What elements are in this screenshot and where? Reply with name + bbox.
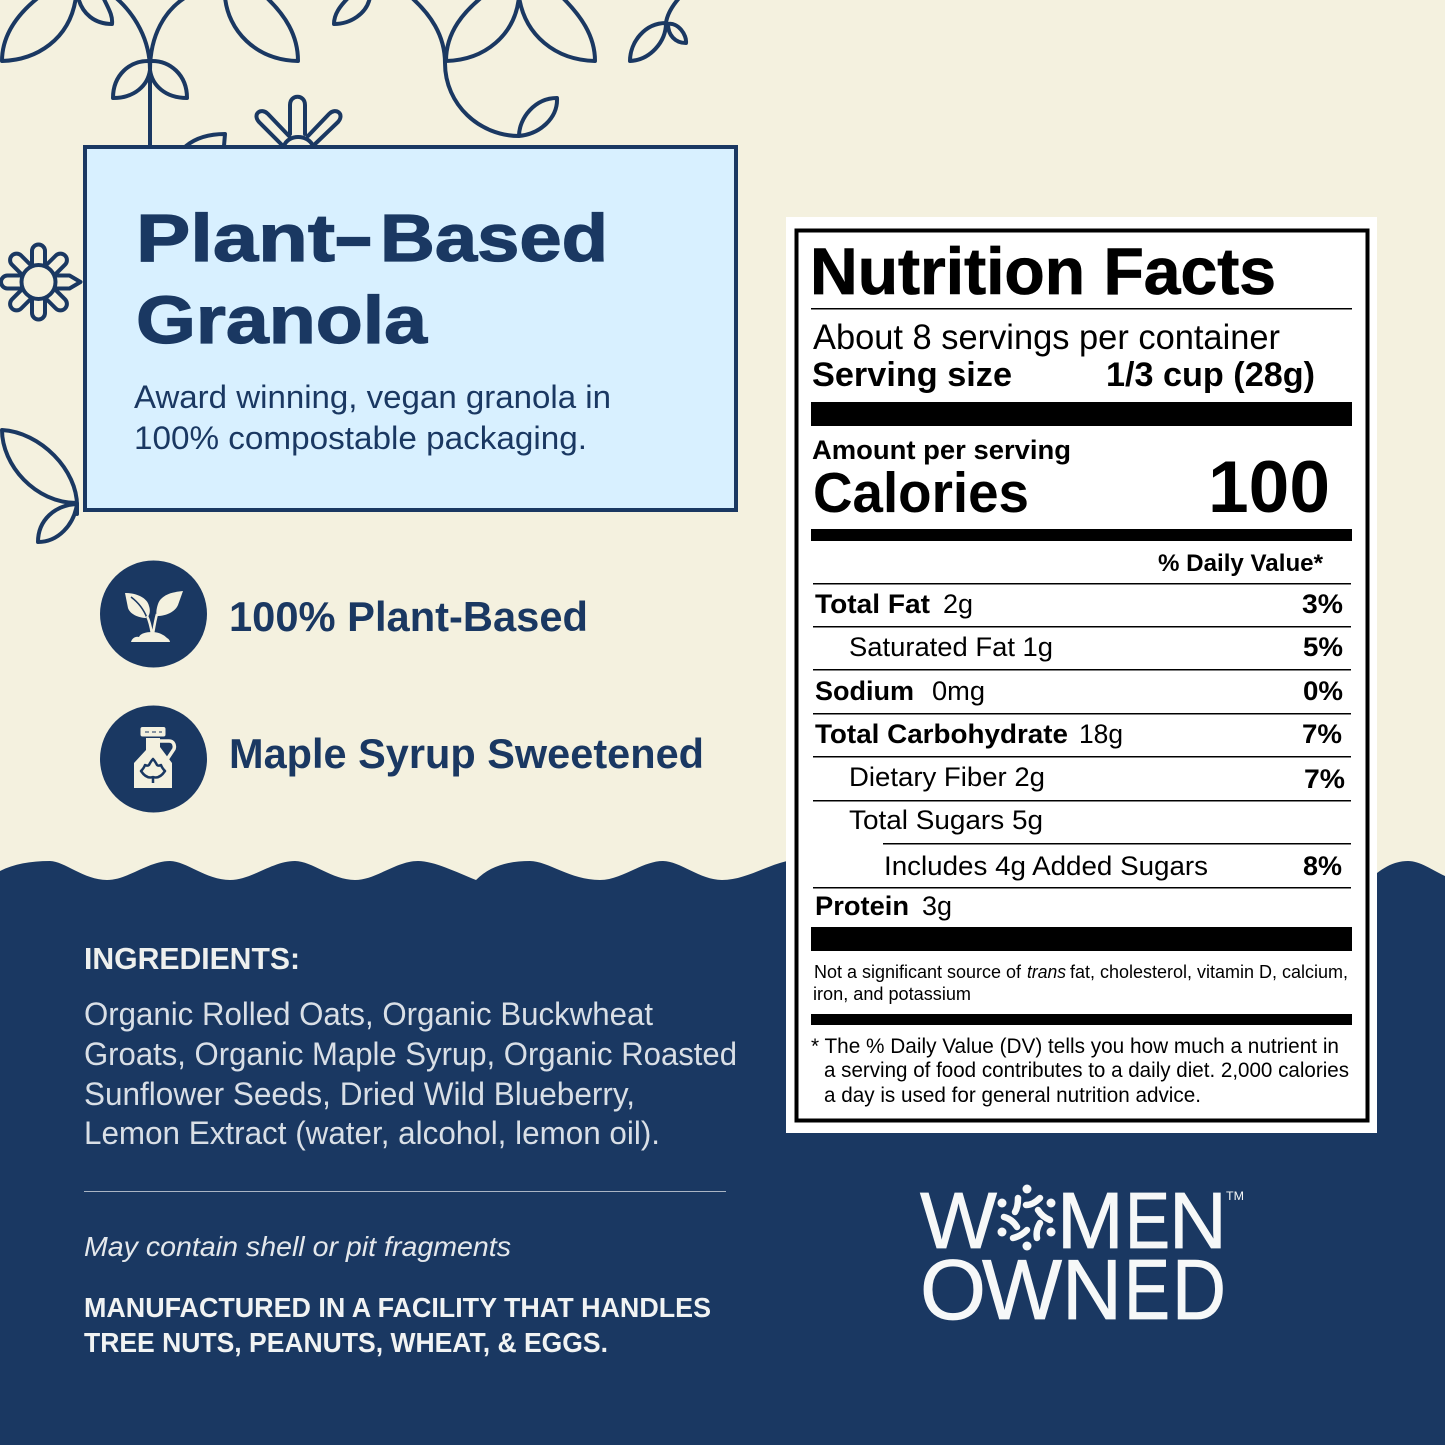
nutrient rows: Dietary Fiber 2g: [849, 762, 1045, 792]
heading: Based: [380, 201, 608, 276]
ingredients list: [84, 996, 737, 1151]
logo: women owned: W: [920, 1176, 997, 1265]
ingredients list: Sunflower Seeds, Dried Wild Blueberry,: [84, 1076, 635, 1112]
logo: women owned: D: [1172, 1243, 1226, 1338]
icon: maple syrup jug: [100, 706, 207, 812]
micronutrient note: fat, cholesterol, vitamin D, calcium,: [1070, 962, 1348, 982]
ingredients list: Groats, Organic Maple Syrup, Organic Roasted: [84, 1036, 737, 1072]
botanical line art: leaves: [2, 430, 77, 542]
daily value footnote: * The % Daily Value (DV) tells you how much a nutrient in: [811, 1035, 1339, 1058]
nutrient rows: Total Sugars 5g: [849, 805, 1043, 835]
nutrient rows: Saturated Fat 1g: [849, 632, 1053, 662]
logo: women owned: E: [1125, 1176, 1170, 1265]
nutrient rows: 5%: [1303, 632, 1343, 662]
nutrient rows: Sodium: [815, 676, 914, 706]
nutrient rows: [815, 589, 1345, 921]
description: Award winning, vegan granola in: [134, 379, 611, 415]
label: plant-based: 100% Plant-Based: [229, 593, 588, 640]
nutrient rows: 8%: [1303, 851, 1342, 881]
logo: women owned: [920, 1176, 1244, 1338]
label: maple syrup: Maple Syrup Sweetened: [229, 730, 704, 777]
description: [134, 379, 611, 456]
botanical line art: top: [2, 0, 686, 146]
icon: sprout: [100, 560, 207, 668]
heading: [136, 199, 608, 358]
daily value footnote: a day is used for general nutrition advice.: [824, 1084, 1201, 1107]
nutrient rows: Protein: [815, 891, 909, 921]
logo: women owned: N: [1169, 1176, 1227, 1265]
servings: [812, 318, 1315, 394]
nutrient rows: Total Carbohydrate: [815, 719, 1068, 749]
nutrition title: Nutrition Facts: [810, 234, 1276, 308]
panel: nutrition facts label: [786, 217, 1377, 1133]
calories: Calories: [813, 461, 1029, 525]
daily value footnote: a serving of food contributes to a daily diet. 2,000 calories: [824, 1059, 1349, 1082]
nutrient rows: 0%: [1303, 676, 1343, 706]
allergen note: May contain shell or pit fragments: [84, 1231, 511, 1262]
micronutrient note: Not a significant source of: [814, 962, 1022, 982]
heading: -: [333, 199, 374, 274]
nutrient rows: 18g: [1079, 719, 1123, 749]
daily value header: % Daily Value*: [1158, 550, 1324, 577]
facility warning: TREE NUTS, PEANUTS, WHEAT, & EGGS.: [84, 1327, 608, 1358]
ingredients list: Lemon Extract (water, alcohol, lemon oil).: [84, 1115, 660, 1151]
nutrient rows: 7%: [1304, 764, 1345, 794]
nutrient rows: Includes 4g Added Sugars: [884, 851, 1208, 881]
navy wave footer: [0, 861, 1445, 1445]
logo: women owned: M: [1057, 1176, 1124, 1265]
logo: women owned: W: [982, 1243, 1062, 1338]
calories: Amount per serving: [812, 435, 1071, 465]
heading: Plant: [136, 201, 335, 276]
calories: 100: [1208, 447, 1330, 528]
ingredients heading: INGREDIENTS:: [84, 941, 300, 976]
heading: Granola: [136, 283, 428, 358]
nutrient rows: Total Fat: [815, 589, 930, 619]
nutrient rows: 0mg: [932, 676, 985, 706]
logo: women owned: N: [1062, 1243, 1122, 1338]
panel: product title card: [85, 147, 736, 510]
micronutrient note: [813, 962, 1348, 1004]
facility warning: MANUFACTURED IN A FACILITY THAT HANDLES: [84, 1292, 711, 1323]
ingredients list: Organic Rolled Oats, Organic Buckwheat: [84, 996, 653, 1032]
nutrient rows: 3%: [1302, 589, 1343, 619]
nutrient rows: 3g: [922, 891, 952, 921]
servings: About 8 servings per container: [813, 318, 1280, 357]
servings: 1/3 cup (28g): [1106, 356, 1315, 394]
facility warning: [84, 1292, 711, 1358]
daily value footnote: [811, 1035, 1349, 1107]
calories: [812, 435, 1330, 528]
micronutrient note: trans: [1027, 962, 1066, 982]
logo: women owned: O: [920, 1243, 986, 1338]
micronutrient note: iron, and potassium: [813, 984, 971, 1004]
botanical line art: flower: [1, 244, 81, 320]
servings: Serving size: [812, 356, 1012, 394]
logo: women owned: E: [1124, 1243, 1170, 1338]
nutrient rows: 2g: [943, 589, 973, 619]
nutrient rows: 7%: [1302, 719, 1342, 749]
logo: women owned: TM: [1226, 1189, 1244, 1203]
description: 100% compostable packaging.: [134, 420, 587, 456]
